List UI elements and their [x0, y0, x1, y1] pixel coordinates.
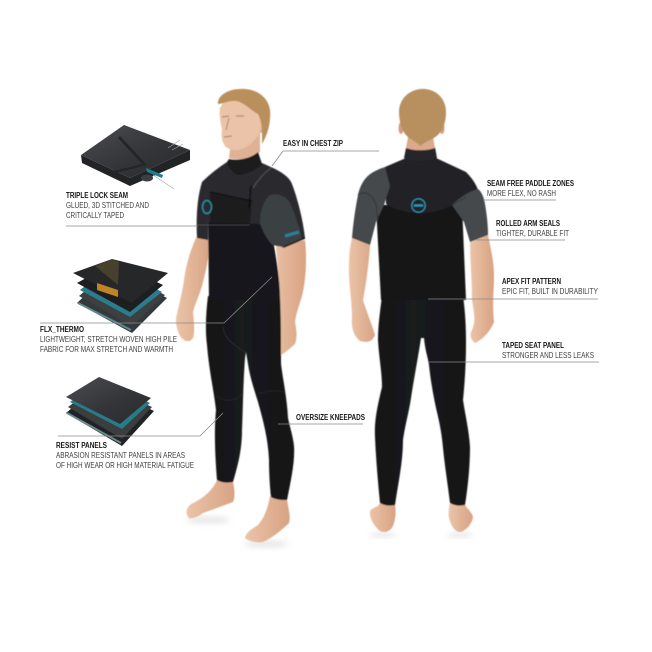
swatch: resist panels layers [66, 377, 154, 446]
label: rolled arm seals: TIGHTER, DURABLE FIT [496, 229, 569, 238]
label: triple lock seam [66, 191, 149, 220]
label: flx thermo: LIGHTWEIGHT, STRETCH WOVEN HIGH PILE [40, 335, 177, 344]
label: oversize kneepads: OVERSIZE KNEEPADS [296, 413, 365, 422]
label: triple lock seam: GLUED, 3D STITCHED AND [66, 201, 149, 210]
label: taped seat panel: STRONGER AND LESS LEAKS [502, 351, 594, 360]
sheet reflection [95, 259, 119, 285]
swatch: flx thermo layers [73, 259, 168, 333]
right sleeve panel [260, 194, 302, 247]
label: rolled arm seals: ROLLED ARM SEALS [496, 219, 560, 228]
block side [81, 150, 190, 186]
label: easy in chest zip: EASY IN CHEST ZIP [283, 139, 343, 148]
tape disc [141, 174, 153, 182]
detail lines [153, 140, 183, 189]
seam [113, 136, 147, 173]
collar [227, 152, 262, 175]
label: flx thermo [40, 325, 177, 354]
ear [258, 121, 264, 133]
label: flx thermo: FABRIC FOR MAX STRETCH AND WARMTH [40, 345, 173, 354]
pocket zip line [210, 192, 252, 201]
teal layer [70, 380, 150, 429]
legs [375, 296, 470, 506]
left arm [349, 238, 375, 342]
torso [376, 205, 466, 300]
figure: front view wearing wetsuit [176, 89, 306, 548]
face [220, 94, 264, 150]
right shoulder and sleeve panel [452, 189, 488, 242]
left shoulder and sleeve panel [352, 167, 390, 245]
right arm [470, 235, 494, 343]
label: seam free paddle zones: MORE FLEX, NO RASH [487, 189, 556, 198]
label: seam free paddle zones [487, 179, 574, 198]
label: resist panels: ABRASION RESISTANT PANELS IN AREAS [56, 451, 185, 460]
left foot [370, 502, 396, 532]
top sheet [73, 259, 168, 303]
second layer [77, 262, 163, 312]
legs [206, 296, 294, 500]
vertical zip [249, 186, 251, 208]
left foot [187, 480, 234, 518]
label: resist panels: OF HIGH WEAR OR HIGH MATERIAL FATIGUE [56, 461, 194, 470]
collar [404, 147, 437, 161]
translucent part with orange panel [97, 283, 118, 297]
back logo [412, 199, 425, 212]
label: resist panels: RESIST PANELS [56, 441, 107, 450]
swatch: triple lock seam material [81, 125, 190, 189]
chest and shoulder panel [197, 162, 305, 248]
sleeve seams [358, 193, 466, 220]
neck [229, 130, 260, 159]
label: triple lock seam: CRITICALLY TAPED [66, 211, 124, 220]
foam layer [68, 383, 152, 439]
hair [218, 89, 270, 144]
label: resist panels [56, 441, 194, 470]
label: flx thermo: FLX_THERMO [40, 325, 84, 334]
left arm [176, 236, 211, 341]
figure: back view wearing wetsuit [349, 89, 494, 538]
right foot [245, 496, 290, 542]
label: apex fit pattern: APEX FIT PATTERN [502, 277, 561, 286]
chest zip pocket [210, 192, 252, 224]
label: rolled arm seals [496, 219, 569, 238]
label: triple lock seam: TRIPLE LOCK SEAM [66, 191, 128, 200]
bottom light edge [67, 413, 121, 443]
block top [81, 125, 190, 178]
hair [399, 89, 446, 146]
crotch seam [223, 327, 245, 352]
base light edge [78, 303, 131, 330]
teal layer [146, 168, 163, 178]
label: apex fit pattern [502, 277, 599, 296]
neck [406, 132, 435, 150]
label: apex fit pattern: EPIC FIT, BUILT IN DURABILITY [502, 287, 599, 296]
label: taped seat panel: TAPED SEAT PANEL [502, 341, 564, 350]
label: seam free paddle zones: SEAM FREE PADDLE ZONES [487, 179, 574, 188]
torso [208, 215, 280, 300]
eyes, nose and mouth [222, 116, 244, 137]
bottom layer [66, 385, 154, 446]
foot shadows [370, 532, 473, 538]
right foot [449, 502, 473, 532]
sleeve logo [285, 232, 299, 236]
right cuff [284, 238, 305, 247]
ears [398, 122, 444, 134]
back shoulder yoke [385, 158, 478, 213]
teal pile [80, 265, 162, 317]
seam to collar [253, 168, 271, 188]
carbon top [66, 377, 151, 424]
base layer [77, 270, 167, 333]
label: taped seat panel [502, 341, 594, 360]
foot shadows [186, 516, 288, 548]
knee panels [216, 391, 284, 400]
callout lines [40, 151, 599, 436]
right arm [270, 240, 306, 358]
grey foam [79, 268, 165, 326]
chest logo [202, 200, 212, 214]
